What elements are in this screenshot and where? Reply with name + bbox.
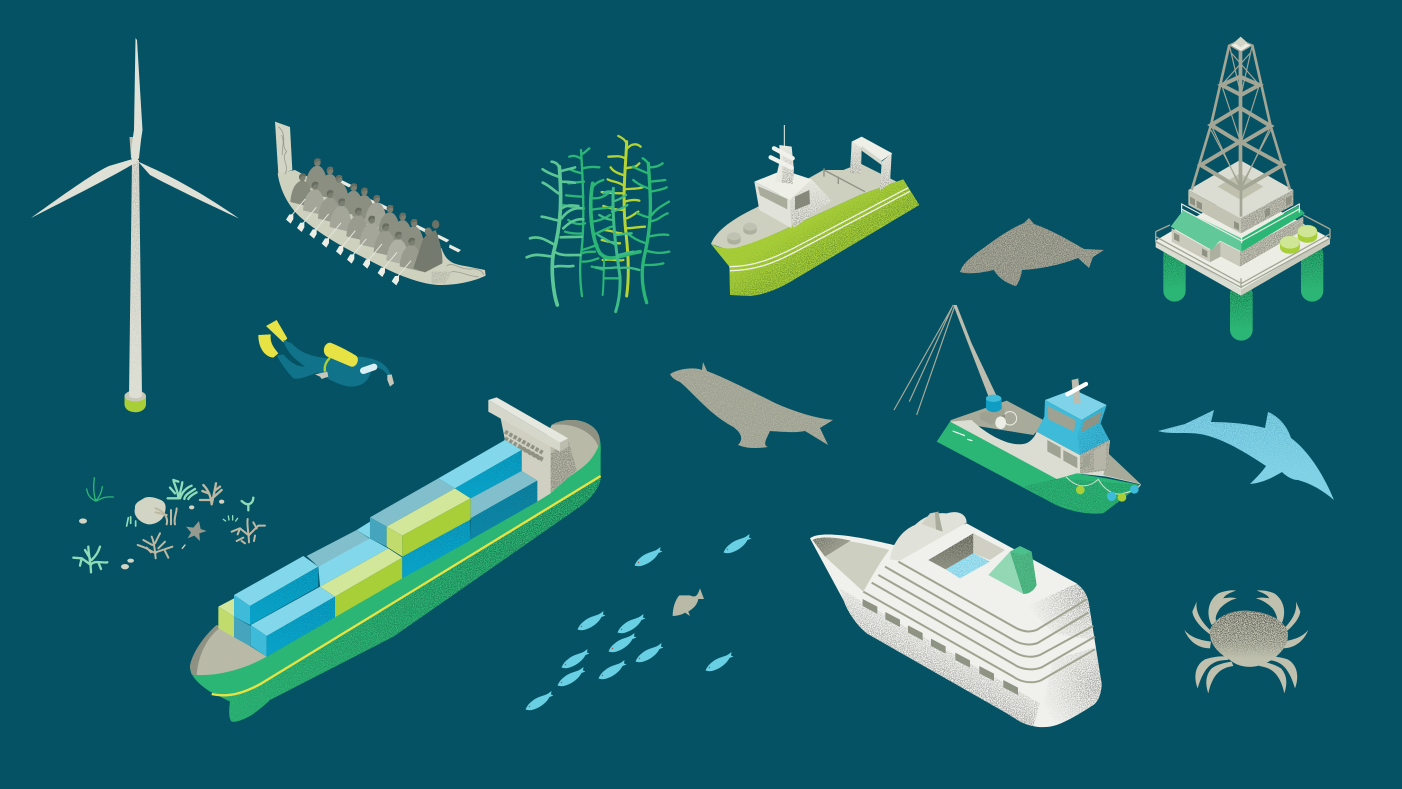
grey starfish xyxy=(186,521,207,541)
back row paddles xyxy=(340,179,461,252)
trawler deck xyxy=(711,163,903,252)
ship stern deck xyxy=(537,420,600,500)
small lime container xyxy=(218,598,251,647)
sea lion xyxy=(670,362,833,448)
grey fish xyxy=(673,588,704,616)
ship bridge wing xyxy=(488,397,568,452)
back row paddlers xyxy=(305,158,424,253)
diver hands xyxy=(315,372,394,387)
fishing boat rear deck xyxy=(950,401,1043,435)
rear blue container xyxy=(438,440,522,498)
trawler mast xyxy=(771,125,794,184)
crab legs and claws left xyxy=(1184,590,1237,693)
green kelp strand far right xyxy=(627,158,669,303)
cruise ship funnel xyxy=(988,546,1037,594)
school of blue fish xyxy=(526,534,752,710)
pale sponge xyxy=(135,497,166,524)
fishing boat boom xyxy=(953,305,997,399)
mint kelp strand right xyxy=(596,188,639,312)
mint dashes xyxy=(223,516,238,521)
fishing boat light deck strip xyxy=(950,420,1141,484)
trawler hull xyxy=(711,179,919,296)
rear dark container xyxy=(470,471,537,540)
trawler gantry xyxy=(850,137,892,191)
platform upper block xyxy=(1188,160,1293,233)
upper lime container xyxy=(387,488,471,557)
lower lime container xyxy=(320,548,402,617)
green kelp strand centre xyxy=(582,180,640,295)
fishing boat rigging lines xyxy=(894,305,955,415)
lower blue container xyxy=(402,519,470,578)
cruise ship portholes xyxy=(863,599,1018,695)
container ship xyxy=(190,397,601,722)
yellow kelp strand xyxy=(602,136,645,296)
fishing boat winch xyxy=(980,395,1017,429)
fishing boat xyxy=(894,305,1141,514)
wind turbine xyxy=(31,38,239,412)
cruise ship deck stripes xyxy=(863,562,1095,682)
trawler deck railing xyxy=(824,168,865,192)
blue dolphin xyxy=(1158,410,1334,500)
cruise ship pool xyxy=(928,533,1005,578)
platform legs xyxy=(1163,243,1323,341)
platform green roof xyxy=(1171,203,1305,252)
ship hull xyxy=(190,420,601,722)
mint kelp strand left xyxy=(527,162,583,305)
crab legs and claws right xyxy=(1256,590,1308,693)
crab shell xyxy=(1210,611,1288,667)
derrick tower xyxy=(1192,37,1290,217)
diver fins xyxy=(258,320,287,358)
tan coral top right xyxy=(200,483,222,504)
cruise ship xyxy=(810,512,1102,727)
fishing boat cabin xyxy=(1037,389,1109,455)
green seagrass xyxy=(87,478,113,501)
ship bridge superstructure xyxy=(500,415,577,502)
diver mask xyxy=(363,367,374,371)
ship container stacks xyxy=(218,440,537,657)
middle container tops xyxy=(307,522,388,587)
coral reef patch xyxy=(73,478,265,572)
front row paddles xyxy=(286,199,411,285)
scuba diver xyxy=(258,320,394,387)
ship yellow waterline xyxy=(212,476,601,695)
grey-blue upper container xyxy=(370,478,455,547)
fishing boat bunting floats xyxy=(1066,477,1141,502)
mint sprig right xyxy=(242,498,253,510)
turbine tower xyxy=(129,160,142,398)
waka canoe with paddlers xyxy=(275,122,486,285)
diver air tank xyxy=(324,343,358,367)
turbine foundation xyxy=(124,390,146,412)
trawler deck hatches xyxy=(727,223,757,245)
mint coral top xyxy=(168,480,197,499)
fishing boat mast xyxy=(1067,378,1086,403)
blue container far left xyxy=(234,556,318,625)
tan coral beside sponge xyxy=(156,508,177,524)
tan coral right xyxy=(232,519,265,543)
fishing boat green hull xyxy=(937,422,1141,514)
tan coral centre xyxy=(138,533,172,558)
pebbles xyxy=(79,500,224,569)
platform storage tanks xyxy=(1280,225,1317,254)
lime green trawler xyxy=(711,125,919,296)
cruise ship hull xyxy=(810,523,1102,727)
diver strap xyxy=(325,358,330,372)
front row paddlers xyxy=(290,173,442,272)
oil platform xyxy=(1156,37,1330,341)
platform lower building walls xyxy=(1172,217,1303,267)
cruise ship bow deck xyxy=(813,538,889,592)
green kelp strand centre left xyxy=(563,148,599,296)
canoe hull xyxy=(275,122,486,285)
fishing boat lower cabin xyxy=(1047,440,1109,474)
kelp xyxy=(527,136,669,312)
diver wetsuit xyxy=(277,340,391,387)
ship bow deck xyxy=(190,625,267,675)
front blue container xyxy=(251,587,335,657)
mint blades xyxy=(127,517,136,526)
fishing boat stern wedge xyxy=(1103,453,1141,484)
grey porpoise xyxy=(960,218,1104,286)
cruise ship bridge dome xyxy=(890,512,967,561)
platform deck xyxy=(1156,190,1330,296)
mint coral bottom xyxy=(73,547,107,572)
turbine nacelle and blades xyxy=(31,38,239,218)
crab xyxy=(1184,590,1308,693)
trawler cabin xyxy=(754,170,832,228)
